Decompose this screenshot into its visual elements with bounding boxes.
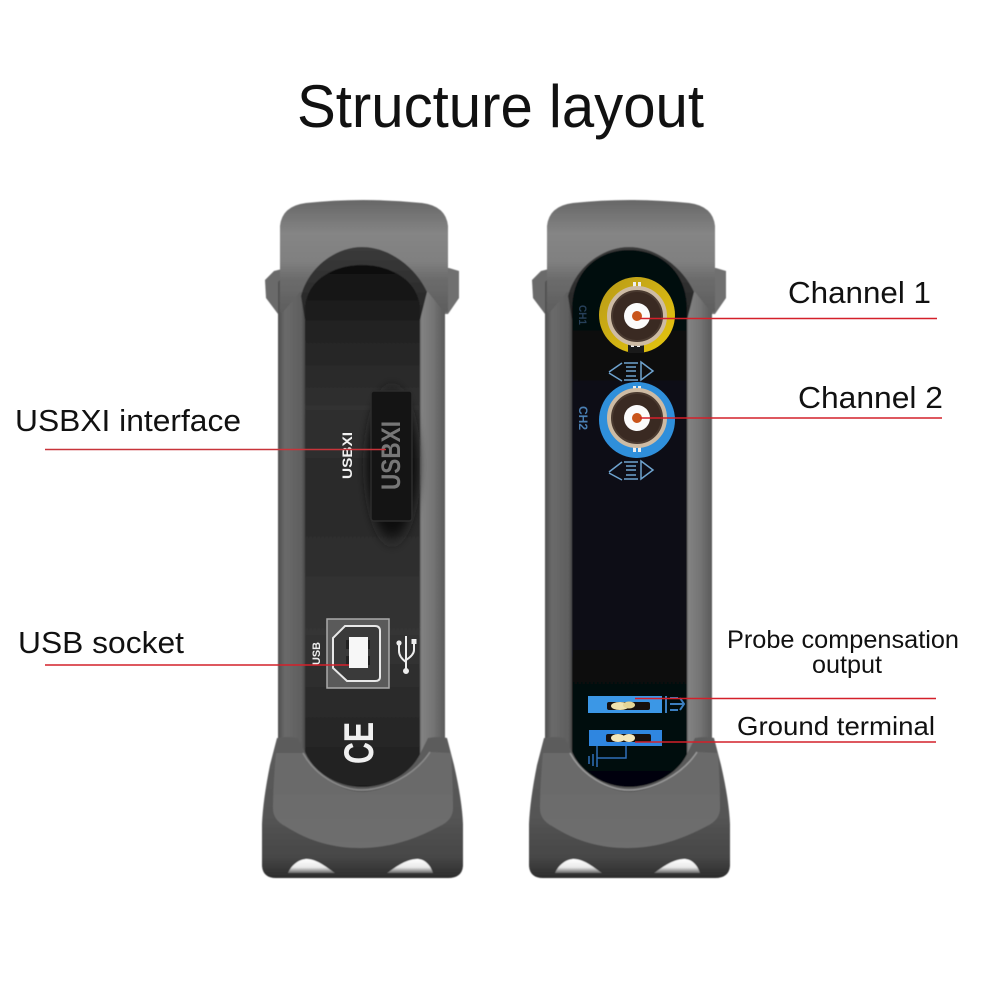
device: right side view (529, 200, 730, 878)
device: left side view (262, 200, 463, 878)
embossed slot lettering: USBXI (376, 421, 406, 490)
leader line: Probe compensation output (635, 698, 936, 700)
BNC connector: channel 2 (599, 382, 675, 458)
leader line: Channel 1 (640, 318, 937, 320)
leader line: Ground terminal (635, 741, 936, 743)
title: Structure layout (297, 73, 704, 140)
leader line: USBXI interface (45, 448, 386, 450)
CE mark: CE (335, 722, 382, 764)
warning symbol: channel 2 (609, 461, 653, 480)
ground terminal (589, 730, 662, 767)
icon: USB trident (397, 636, 416, 673)
device shell: right (529, 200, 730, 878)
label: Probe compensation output: Probe compensation (727, 626, 959, 654)
label: Probe compensation output (727, 626, 959, 679)
printed label: CH1: CH1 (576, 305, 588, 325)
printed label: CH2: CH2 (576, 406, 590, 430)
recess: USBXI slot (362, 380, 422, 550)
label: USBXI interface: USBXI interface (15, 403, 241, 438)
label: Channel 2: Channel 2 (798, 380, 943, 415)
leader line: USB socket (45, 664, 349, 666)
label: Channel 1: Channel 1 (788, 275, 931, 310)
warning symbol: channel 1 (609, 362, 653, 381)
probe compensation terminal (588, 696, 684, 713)
device shell: left (262, 200, 463, 878)
printed label: USBXI: USBXI (339, 432, 355, 479)
label: Ground terminal: Ground terminal (737, 711, 935, 741)
BNC connector: channel 1 (599, 277, 675, 353)
label: Probe compensation output: output (812, 651, 882, 679)
label: USB socket: USB socket (18, 625, 184, 660)
printed label: USB: USB (311, 642, 323, 665)
USB type-B socket (327, 619, 389, 688)
leader line: Channel 2 (640, 417, 942, 419)
